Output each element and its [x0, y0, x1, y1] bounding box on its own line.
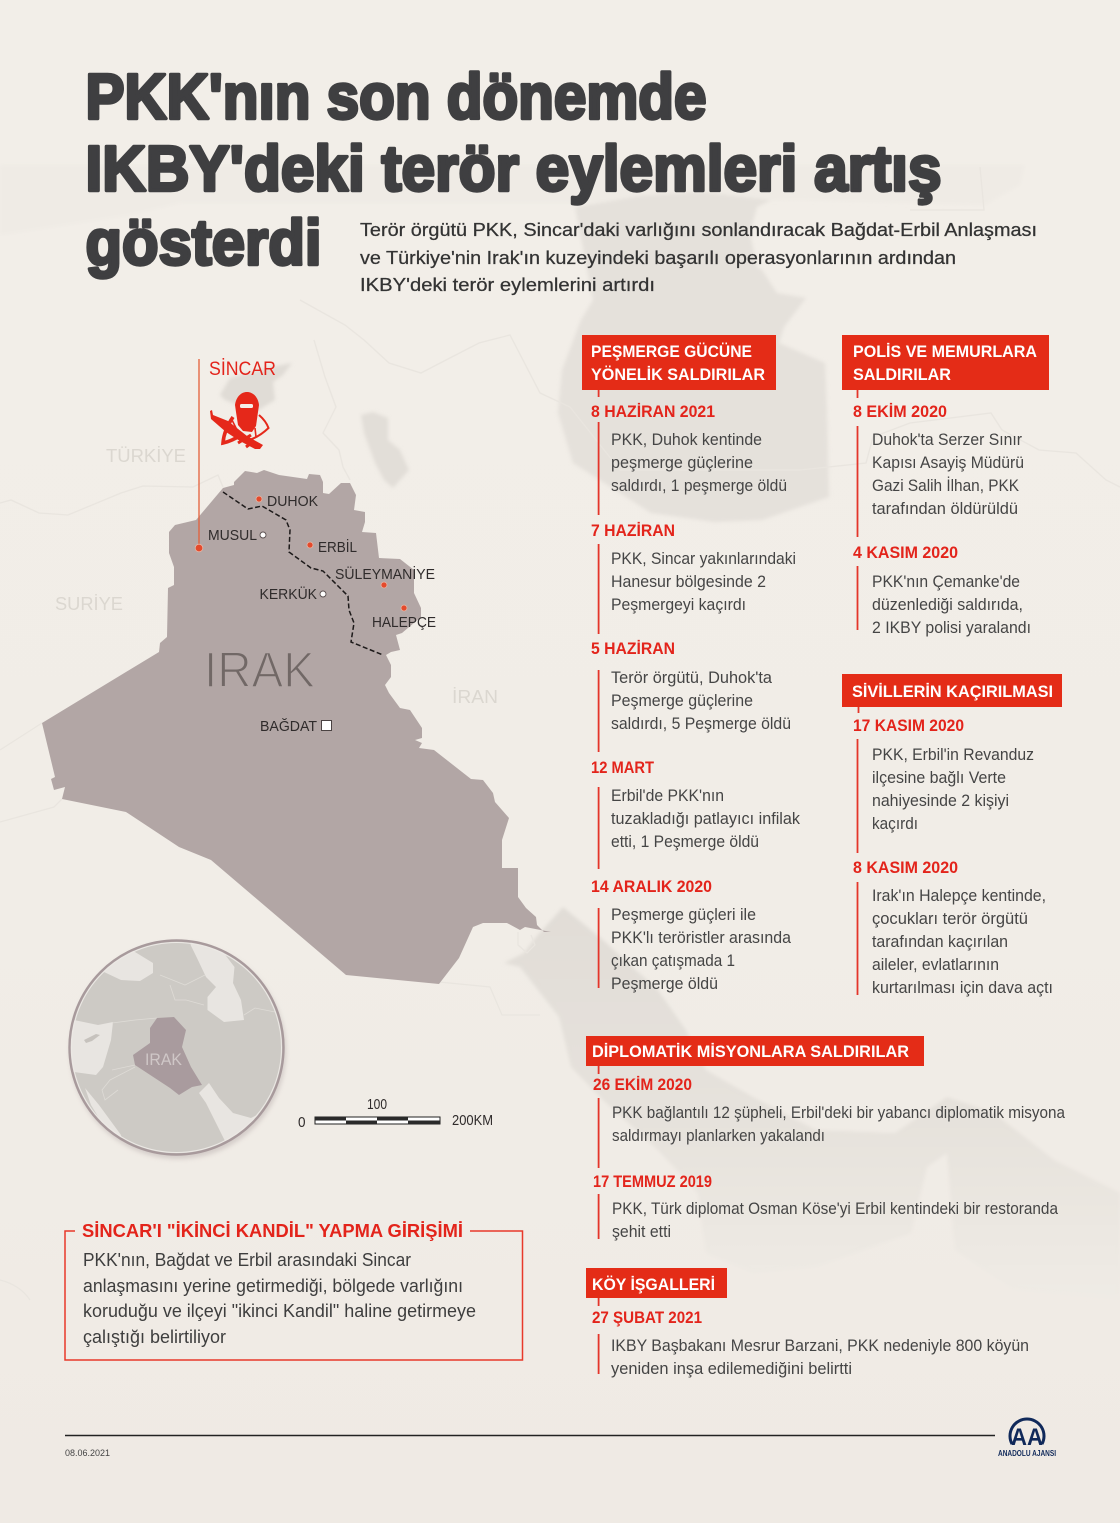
entry: 14 Aralik 2020: PKK'lı teröristler arasında: [611, 928, 792, 947]
entry: 17 Kasim 2020: PKK, Erbil'in Revanduz: [872, 745, 1034, 764]
entry: 14 Aralik 2020: [591, 877, 792, 993]
entry: 8 Kasim 2020: 8 KASIM 2020: [853, 858, 958, 877]
footer: 08.06.2021: [65, 1448, 110, 1459]
city labels: KERKÜK: [260, 585, 317, 603]
entry: 14 Aralik 2020: 14 ARALIK 2020: [591, 877, 712, 896]
icon: armed militant: [210, 392, 268, 449]
background map: faint regional geography: [0, 165, 1120, 1300]
entry: 8 Kasim 2020: aileler, evlatlarının: [872, 955, 999, 974]
panel: village occupations: [586, 1268, 1029, 1378]
callout: second Kandil attempt: anlaşmasını yerine getirmediği, bölgede varlığını: [83, 1275, 463, 1296]
entry: 14 Aralik 2020: çıkan çatışmada 1: [611, 951, 735, 970]
entry: 8 Ekim 2020: tarafından öldürüldü: [872, 499, 1018, 518]
city labels: SÜLEYMANİYE: [335, 565, 435, 583]
entry: 8 Ekim 2020: Kapısı Asayiş Müdürü: [872, 453, 1024, 472]
entry: 8 Kasim 2020: çocukları terör örgütü: [872, 909, 1028, 928]
entry: 17 Temmuz 2019: [593, 1172, 1058, 1241]
entry: 8 Kasim 2020: Irak'ın Halepçe kentinde,: [872, 886, 1046, 905]
heading: SİVİLLERİN KAÇIRILMASI: [852, 682, 1053, 701]
country labels: İRAN: [452, 686, 498, 707]
entry: 8 Haziran 2021: 8 HAZİRAN 2021: [591, 402, 715, 421]
entry: 17 Kasim 2020: kaçırdı: [872, 814, 918, 833]
entry: 7 Haziran: PKK, Sincar yakınlarındaki: [611, 549, 796, 568]
standfirst text: Terör örgütü PKK, Sincar'daki varlığını sonlandıracak Bağdat-Erbil Anlaşması: [360, 219, 1037, 240]
entry: 7 Haziran: 7 HAZİRAN: [591, 521, 675, 540]
entry: 17 Kasim 2020: 17 KASIM 2020: [853, 716, 964, 735]
city labels: [208, 493, 436, 735]
country labels: TÜRKİYE: [106, 445, 186, 466]
entry: 27 Subat 2021: [592, 1308, 1029, 1378]
entry: 5 Haziran: [591, 639, 791, 752]
entry: 17 Temmuz 2019: PKK, Türk diplomat Osman Köse'yi Erbil kentindeki bir restoranda: [612, 1199, 1058, 1218]
callout: second Kandil attempt: [65, 1220, 522, 1360]
entry: 8 Haziran 2021: PKK, Duhok kentinde: [611, 430, 762, 449]
locator globe: [60, 930, 286, 1165]
locator globe: IRAK: [145, 1050, 183, 1069]
entry: 7 Haziran: Hanesur bölgesinde 2: [611, 572, 766, 591]
entry: 5 Haziran: Peşmerge güçlerine: [611, 691, 753, 710]
heading: [586, 1268, 727, 1306]
country labels: IRAK: [204, 642, 315, 698]
standfirst text: IKBY'deki terör eylemlerini artırdı: [360, 274, 655, 295]
title: IKBY'deki terör eylemleri artış: [86, 132, 942, 204]
callout: second Kandil attempt: çalıştığı belirtiliyor: [83, 1326, 226, 1347]
heading: [842, 335, 1049, 398]
entry: 8 Kasim 2020: tarafından kaçırılan: [872, 932, 1008, 951]
country labels: SURİYE: [55, 593, 123, 614]
panel: attacks on Peshmerga: [582, 335, 800, 993]
panel: kidnapping of civilians: [842, 674, 1062, 997]
entry: 27 Subat 2021: 27 ŞUBAT 2021: [592, 1308, 702, 1327]
entry: 12 Mart: etti, 1 Peşmerge öldü: [611, 832, 759, 851]
callout: second Kandil attempt: SİNCAR'I "İKİNCİ KANDİL" YAPMA GİRİŞİMİ: [82, 1220, 463, 1241]
city labels: ERBİL: [318, 538, 357, 556]
entry: 26 Ekim 2020: 26 EKİM 2020: [593, 1075, 692, 1094]
standfirst text: [360, 219, 1037, 295]
entry: 4 Kasim 2020: PKK'nın Çemanke'de: [872, 572, 1020, 591]
entry: 4 Kasim 2020: 2 IKBY polisi yaralandı: [872, 618, 1031, 637]
entry: 8 Haziran 2021: saldırdı, 1 peşmerge öldü: [611, 476, 787, 495]
entry: 8 Kasim 2020: kurtarılması için dava açtı: [872, 978, 1053, 997]
standfirst text: ve Türkiye'nin Irak'ın kuzeyindeki başarılı operasyonlarının ardından: [360, 247, 956, 268]
country labels: [55, 445, 498, 707]
Sincar marker: SİNCAR: [209, 359, 276, 380]
panel: attacks on diplomatic missions: [586, 1036, 1065, 1241]
entry: 17 Temmuz 2019: şehit etti: [612, 1222, 671, 1241]
heading: YÖNELİK SALDIRILAR: [591, 365, 765, 384]
entry: 8 Ekim 2020: Duhok'ta Serzer Sınır: [872, 430, 1022, 449]
heading: [586, 1036, 924, 1074]
entry: 8 Ekim 2020: Gazi Salih İlhan, PKK: [872, 476, 1020, 495]
entry: 27 Subat 2021: yeniden inşa edilemediğini belirtti: [611, 1359, 852, 1378]
entry: 7 Haziran: [591, 521, 796, 634]
entry: 26 Ekim 2020: [593, 1075, 1065, 1168]
heading: PEŞMERGE GÜCÜNE: [591, 342, 752, 361]
city labels: DUHOK: [267, 493, 318, 510]
entry: 12 Mart: Erbil'de PKK'nın: [611, 786, 724, 805]
entry: 17 Kasim 2020: ilçesine bağlı Verte: [872, 768, 1006, 787]
icon: Anadolu Agency logo: ANADOLU AJANSI: [998, 1449, 1056, 1458]
entry: 17 Temmuz 2019: 17 TEMMUZ 2019: [593, 1172, 712, 1191]
heading: DİPLOMATİK MİSYONLARA SALDIRILAR: [592, 1042, 909, 1061]
entry: 14 Aralik 2020: Peşmerge güçleri ile: [611, 905, 756, 924]
entry: 26 Ekim 2020: saldırmayı planlarken yakalandı: [612, 1126, 825, 1145]
callout: second Kandil attempt: PKK'nın, Bağdat ve Erbil arasındaki Sincar: [83, 1249, 411, 1270]
heading: SALDIRILAR: [853, 365, 951, 384]
entry: 7 Haziran: Peşmergeyi kaçırdı: [611, 595, 746, 614]
entry: 12 Mart: [591, 758, 800, 869]
entry: 5 Haziran: 5 HAZİRAN: [591, 639, 675, 658]
entry: 8 Ekim 2020: [853, 402, 1024, 537]
entry: 12 Mart: tuzakladığı patlayıcı infilak: [611, 809, 800, 828]
title: PKK'nın son dönemde: [86, 60, 706, 132]
entry: 8 Haziran 2021: peşmerge güçlerine: [611, 453, 753, 472]
scale bar: 100: [367, 1096, 387, 1113]
panel: attacks on police and officials: [842, 335, 1049, 637]
entry: 14 Aralik 2020: Peşmerge öldü: [611, 974, 718, 993]
icon: Anadolu Agency logo: AA: [1011, 1424, 1043, 1451]
entry: 12 Mart: 12 MART: [591, 758, 655, 777]
entry: 17 Kasim 2020: nahiyesinde 2 kişiyi: [872, 791, 1009, 810]
Iraq country shape: [42, 470, 551, 984]
entry: 4 Kasim 2020: düzenlediği saldırıda,: [872, 595, 1023, 614]
city labels: MUSUL: [208, 527, 257, 544]
callout: second Kandil attempt: koruduğu ve ilçeyi "ikinci Kandil" haline getirmeye: [83, 1300, 476, 1321]
entry: 4 Kasim 2020: [853, 543, 1031, 637]
heading: POLİS VE MEMURLARA: [853, 342, 1037, 361]
entry: 26 Ekim 2020: PKK bağlantılı 12 şüpheli, Erbil'deki bir yabancı diplomatik misyona: [612, 1103, 1065, 1122]
entry: 8 Kasim 2020: [853, 858, 1053, 997]
KRG dashed boundary: [223, 492, 383, 655]
city labels: BAĞDAT: [260, 718, 317, 735]
icon: Anadolu Agency logo: [998, 1419, 1056, 1458]
Sincar marker: [195, 359, 276, 552]
entry: 5 Haziran: Terör örgütü, Duhok'ta: [611, 668, 773, 687]
scale bar: 200KM: [452, 1112, 493, 1129]
heading: [842, 674, 1062, 713]
scale bar: 0: [298, 1114, 306, 1131]
entry: 4 Kasim 2020: 4 KASIM 2020: [853, 543, 958, 562]
title: gösterdi: [86, 206, 322, 278]
heading: KÖY İŞGALLERİ: [592, 1275, 715, 1294]
city labels: HALEPÇE: [372, 614, 436, 631]
title: [86, 60, 942, 278]
entry: 8 Haziran 2021: [591, 402, 787, 515]
entry: 27 Subat 2021: IKBY Başbakanı Mesrur Barzani, PKK nedeniyle 800 köyün: [611, 1336, 1029, 1355]
entry: 5 Haziran: saldırdı, 5 Peşmerge öldü: [611, 714, 791, 733]
entry: 8 Ekim 2020: 8 EKİM 2020: [853, 402, 947, 421]
map: Iraq: [42, 359, 551, 984]
heading: [582, 335, 776, 397]
scale bar: [298, 1096, 493, 1131]
entry: 17 Kasim 2020: [853, 716, 1034, 853]
